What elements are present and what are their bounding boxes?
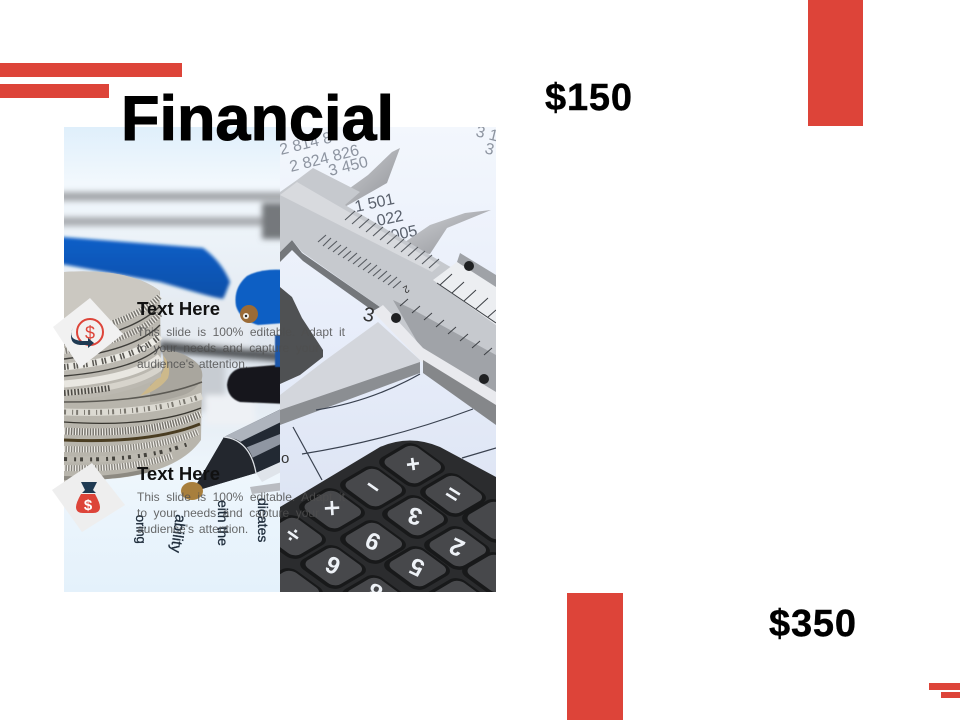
icon: money bag: $ [84, 497, 93, 514]
text block: first item: audience's attention. [137, 357, 248, 371]
title: Financial [121, 84, 394, 154]
brass pen tip [240, 305, 258, 323]
calculator body [280, 440, 496, 592]
plate shadow edge [280, 362, 420, 425]
paper numbers: 2 824 826 [288, 142, 361, 176]
main beam underside [280, 240, 380, 311]
text block: second item: This slide is 100% editable. Adapt it [137, 490, 346, 504]
calculator key labels: 5 [405, 551, 429, 582]
lower coin stack [64, 350, 202, 482]
paper numbers: 2 814 8 [278, 129, 334, 159]
text block: second item [137, 464, 346, 536]
calculator key labels: = [440, 479, 466, 510]
paper numbers: 3 1 [474, 123, 500, 145]
text block: first item: This slide is 100% editable. Adapt it [137, 325, 346, 339]
icon: dollar circle with arrow: $ [85, 323, 95, 343]
slider scale [400, 274, 496, 355]
calculator key labels: − [359, 472, 386, 502]
calculator key labels: 6 [321, 549, 345, 580]
text block: first item [137, 299, 346, 371]
large digit 3 on paper: 3 [361, 303, 376, 327]
paper digit: o [281, 450, 289, 467]
paper numbers: 1 501 [353, 191, 396, 216]
graph lines [293, 374, 496, 480]
decorative block: top right [808, 0, 863, 126]
slider grey side [423, 360, 496, 425]
pliers head [280, 287, 323, 384]
beam digit: 2 [400, 282, 411, 295]
slider screws [391, 261, 489, 384]
upper caliper jaw [345, 148, 400, 206]
value: $150: $150 [545, 77, 632, 119]
decorative bars: bottom right [929, 683, 960, 698]
paper words below the pen: ability [167, 513, 189, 554]
calculator key labels: 9 [361, 525, 385, 556]
text block: first item: Text Here [137, 299, 220, 319]
paper words below the pen: dicates [255, 498, 271, 542]
calculator key labels: 2 [445, 531, 469, 562]
decorative block: bottom centre [567, 593, 623, 720]
slider white lower strip [373, 305, 496, 408]
text block: second item: audience's attention. [137, 522, 248, 536]
calculator key labels: 3 [405, 501, 425, 530]
icon: money bag [52, 463, 125, 532]
dark fountain pen [181, 407, 285, 500]
calculator key labels [287, 458, 466, 592]
beam highlight [280, 182, 440, 272]
calculator key labels: + [404, 450, 422, 479]
blurred desk behind coins [160, 295, 276, 414]
upper coin stack [64, 271, 161, 400]
text block: first item: to your needs and capture your [137, 341, 319, 355]
paper words below the pen: oring [133, 515, 149, 544]
lower caliper jaw [403, 210, 491, 254]
decorative bar: top left short [0, 84, 109, 98]
blue pen body [50, 236, 230, 300]
slider white section [433, 262, 496, 325]
calculator key labels: × [317, 494, 346, 523]
blue pen cap [235, 270, 285, 325]
beam scale ticks [318, 211, 439, 288]
paper numbers: 3 [483, 140, 496, 159]
paper words below the pen [133, 498, 271, 554]
paper numbers: 3 450 [327, 154, 370, 180]
icon: dollar circle with arrow [53, 298, 123, 368]
lower plate of the caliper [280, 322, 420, 412]
text block: second item: Text Here [137, 464, 220, 484]
paper numbers: 005 [389, 223, 419, 245]
slider top strip [457, 253, 496, 290]
photo: caliper and calculator (right half) [280, 127, 496, 592]
calculator key labels: 8 [363, 576, 387, 607]
paper words below the pen: eith the [215, 500, 231, 546]
small blue pen edge [274, 334, 280, 368]
decorative bar: top left long [0, 63, 182, 77]
photo: coins and pens (left half) [64, 127, 280, 592]
value: $350: $350 [769, 603, 856, 645]
slider dark section [393, 300, 496, 392]
paper numbers [280, 127, 496, 238]
blurred pen barrels [40, 192, 300, 239]
black pen cap behind [226, 364, 280, 404]
main caliper beam [280, 168, 496, 355]
text block: second item: to your needs and capture your [137, 506, 319, 520]
calculator keys [280, 443, 496, 592]
paper numbers: 022 [375, 208, 405, 230]
calculator key labels: ÷ [280, 521, 306, 550]
coin top surface [150, 350, 202, 402]
